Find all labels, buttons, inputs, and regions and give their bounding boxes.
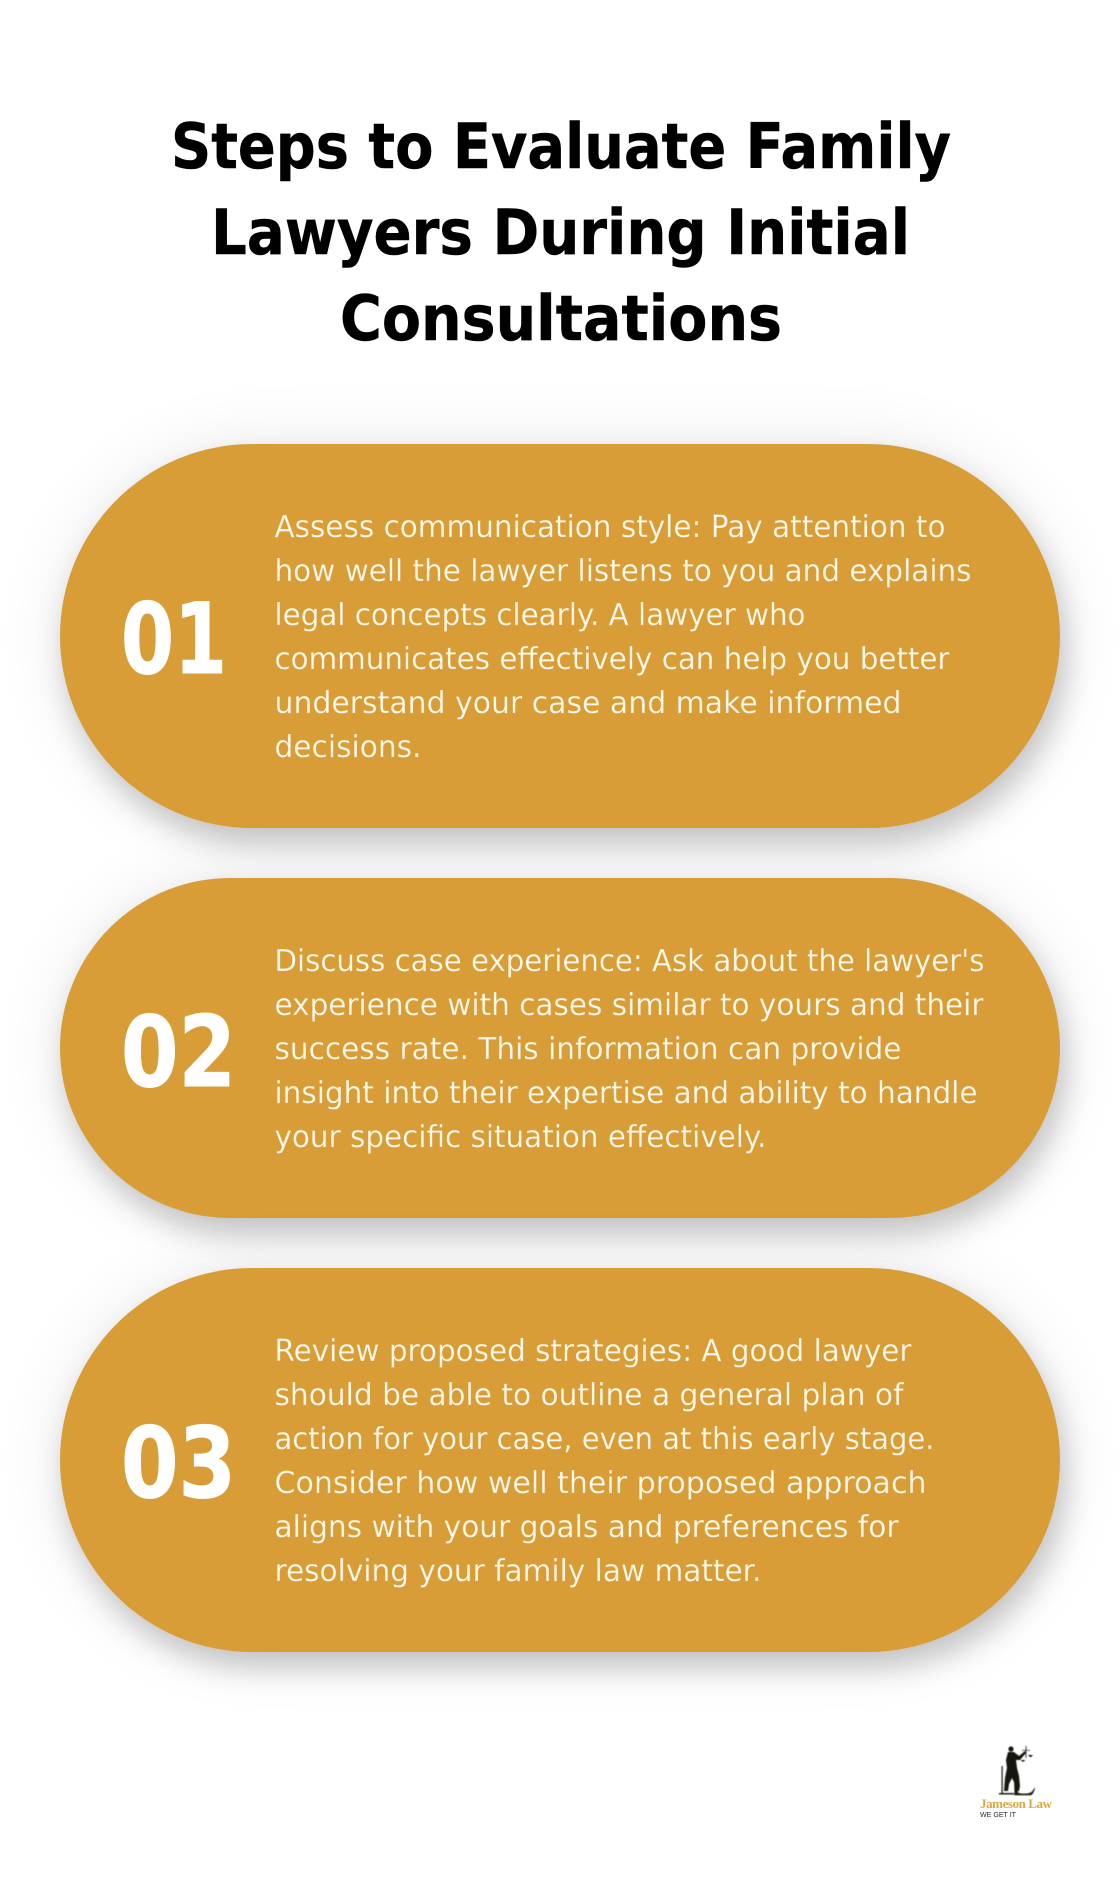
step 02 description: success rate. This information can provide <box>274 1032 902 1067</box>
icon: lady justice statue with L <box>999 1746 1035 1795</box>
step 03 description: should be able to outline a general plan of <box>274 1378 905 1413</box>
title: Lawyers During Initial <box>211 196 910 269</box>
step 03 description: Review proposed strategies: A good lawyer <box>274 1334 912 1369</box>
panel: step 02 case experience <box>60 878 1066 1234</box>
step 02 description <box>274 944 984 1155</box>
panel: step 03 proposed strategies <box>60 1268 1066 1668</box>
step 03 description: Consider how well their proposed approach <box>274 1466 926 1501</box>
logo name: Jameson Law <box>980 1796 1053 1811</box>
step 02 description: experience with cases similar to yours and their <box>274 988 984 1023</box>
step 01 description: Assess communication style: Pay attention to <box>274 510 946 545</box>
step 03 description <box>274 1334 934 1589</box>
step 03 description: aligns with your goals and preferences for <box>274 1510 899 1545</box>
panel: step 01 communication <box>60 444 1066 844</box>
step 03 description: action for your case, even at this early stage. <box>274 1422 934 1457</box>
logo tagline: WE GET IT <box>980 1810 1016 1819</box>
step 01 description: how well the lawyer listens to you and explains <box>274 554 972 589</box>
step 02 description: insight into their expertise and ability to handle <box>274 1076 978 1111</box>
step 01 description: legal concepts clearly. A lawyer who <box>274 598 806 633</box>
step number 03: 03 <box>121 1407 236 1521</box>
step 01 description: understand your case and make informed <box>274 686 902 721</box>
step 01 description: communicates effectively can help you better <box>274 642 950 677</box>
title <box>171 110 951 355</box>
title: Steps to Evaluate Family <box>171 110 951 183</box>
step 01 description: decisions. <box>274 730 422 765</box>
logo: Jameson Law <box>980 1746 1053 1819</box>
step 02 description: your specific situation effectively. <box>274 1120 766 1155</box>
step 01 description <box>274 510 972 765</box>
step 02 description: Discuss case experience: Ask about the lawyer's <box>274 944 984 979</box>
step number 02: 02 <box>121 996 236 1110</box>
title: Consultations <box>340 282 782 355</box>
step 03 description: resolving your family law matter. <box>274 1554 762 1589</box>
step number 01: 01 <box>121 583 227 697</box>
